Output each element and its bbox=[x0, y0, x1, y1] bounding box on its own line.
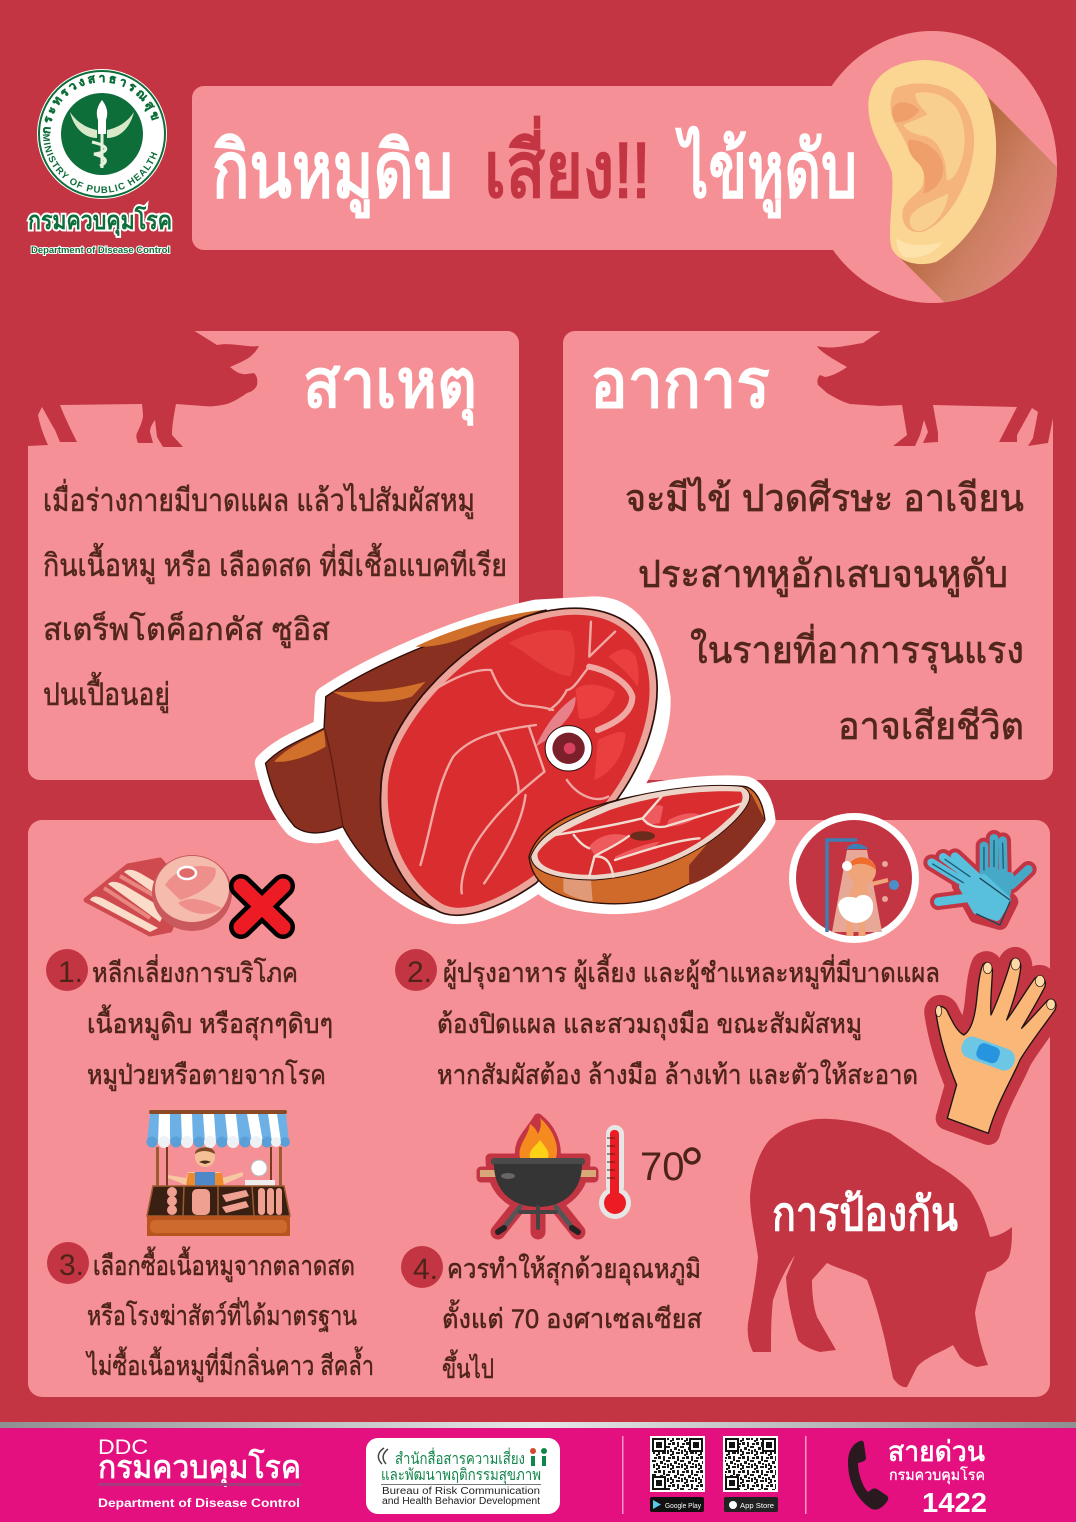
temperature label: 70 bbox=[640, 1145, 684, 1189]
item 2: ต้องปิดแผล และสวมถุงมือ ขณะสัมผัสหมู bbox=[437, 1009, 862, 1041]
item 1: หมูป่วยหรือตายจากโรค bbox=[87, 1060, 326, 1091]
footer: bureau logo: Bureau of Risk Communication bbox=[382, 1486, 540, 1497]
red cross bbox=[241, 886, 283, 927]
icon: grill bbox=[480, 1118, 596, 1232]
text: symptoms: ประสาทหูอักเสบจนหูดับ bbox=[638, 554, 1008, 597]
icon: market stall bbox=[146, 1110, 290, 1236]
icon: ear bbox=[868, 60, 1057, 302]
badge: Google Play: Google Play bbox=[665, 1503, 701, 1510]
icon: hand with bandage bbox=[936, 958, 1056, 1133]
title text bbox=[212, 117, 857, 217]
footer: bureau logo: and Health Behavior Development bbox=[382, 1496, 540, 1507]
title text: ไข้หูดับ bbox=[676, 126, 857, 217]
ear circle backdrop bbox=[807, 31, 1057, 303]
title text: กินหมูดิบ bbox=[212, 126, 453, 217]
item 1 bbox=[46, 949, 333, 1091]
text: symptoms: อาจเสียชีวิต bbox=[838, 706, 1024, 748]
item 4: ขึ้นไป bbox=[442, 1349, 494, 1384]
item 2: หากสัมผัสต้อง ล้างมือ ล้างเท้า และตัวให้สะอาด bbox=[437, 1059, 918, 1090]
text: symptoms: ในรายที่อาการรุนแรง bbox=[690, 624, 1024, 673]
pig silhouette with prevention heading bbox=[748, 1119, 1012, 1387]
logo Thai name: กรมควบคุมโรค bbox=[28, 205, 172, 237]
item 3 bbox=[47, 1242, 374, 1382]
counter bbox=[147, 1186, 290, 1216]
icon: thermometer bbox=[599, 1125, 631, 1219]
badge: App Store bbox=[724, 1497, 778, 1512]
icon: gloves bbox=[932, 838, 1028, 925]
item 2: ผู้ปรุงอาหาร ผู้เลี้ยง และผู้ชำแหละหมูที่มีบาดแผล bbox=[443, 953, 940, 990]
ham side bbox=[265, 610, 546, 910]
panel: causes bbox=[0, 320, 519, 780]
illustration: pork leg and slice bbox=[265, 607, 765, 915]
item 3: เลือกซื้อเนื้อหมูจากตลาดสด bbox=[93, 1246, 355, 1282]
white sticker outline bbox=[265, 607, 765, 914]
footer: bureau logo: และพัฒนาพฤติกรรมสุขภาพ bbox=[381, 1467, 541, 1485]
footer: hotline bbox=[888, 1436, 987, 1518]
text: causes: เมื่อร่างกายมีบาดแผล แล้วไปสัมผัสหมู bbox=[43, 479, 475, 519]
text: causes: ปนเปื้อนอยู่ bbox=[43, 672, 170, 713]
QR code: Google Play bbox=[650, 1436, 705, 1492]
pig silhouette with prevention heading: การป้องกัน bbox=[772, 1187, 958, 1240]
icon: shower bbox=[789, 813, 919, 943]
footer: department name: กรมควบคุมโรค bbox=[98, 1449, 301, 1487]
scale bbox=[245, 1160, 275, 1186]
footer: department name: DDC bbox=[98, 1436, 148, 1459]
logo: Ministry of Public Health: MINISTRY OF PUBLIC HEALTH bbox=[42, 134, 158, 194]
item 1: หลีกเลี่ยงการบริโภค bbox=[92, 954, 298, 988]
footer: department name: Department of Disease Control bbox=[98, 1496, 300, 1510]
text: symptoms: จะมีไข้ ปวดศีรษะ อาเจียน bbox=[625, 477, 1024, 520]
slice bbox=[529, 785, 765, 904]
item 3: ไม่ซื้อเนื้อหมูที่มีกลิ่นคาว สีคล้ำ bbox=[85, 1346, 374, 1382]
item 1: เนื้อหมูดิบ หรือสุกๆดิบๆ bbox=[87, 1004, 333, 1041]
text: causes: สเตร็พโตค็อกคัส ซูอิส bbox=[43, 611, 330, 648]
footer: bureau logo: สำนักสื่อสารความเสี่ยง bbox=[395, 1447, 525, 1468]
logo: Ministry of Public Health: กระทรวงสาธารณสุข bbox=[42, 74, 160, 134]
item 4 bbox=[401, 1246, 702, 1384]
bone bbox=[545, 726, 592, 771]
item 3: 3. bbox=[59, 1249, 84, 1282]
heading: causes: สาเหตุ bbox=[303, 346, 477, 425]
QR code: App Store bbox=[723, 1436, 778, 1492]
footer: hotline: 1422 bbox=[922, 1487, 987, 1518]
ham face fat bbox=[381, 608, 657, 915]
item 2 bbox=[395, 949, 940, 1090]
item 2: 2. bbox=[407, 956, 432, 989]
item 4: ควรทำให้สุกด้วยอุณหภูมิ bbox=[447, 1253, 701, 1286]
pig silhouette right bbox=[817, 320, 1076, 460]
logo: Ministry of Public Health bbox=[26, 69, 172, 256]
pig silhouette left bbox=[0, 320, 259, 447]
badge: Google Play bbox=[650, 1497, 704, 1512]
title banner bbox=[192, 31, 1057, 303]
badge: App Store: App Store bbox=[740, 1503, 774, 1510]
panel: prevention bbox=[28, 813, 1056, 1397]
footer: hotline: กรมควบคุมโรค bbox=[889, 1466, 985, 1485]
text: symptoms bbox=[625, 477, 1024, 748]
title text: เสี่ยง!! bbox=[484, 117, 650, 214]
heading: symptoms: อาการ bbox=[590, 346, 770, 422]
icon: bacon and pork with red cross bbox=[86, 855, 283, 934]
logo English name: Department of Disease Control bbox=[31, 245, 170, 256]
text: causes bbox=[43, 479, 507, 713]
footer: hotline: สายด่วน bbox=[888, 1436, 985, 1467]
emblem bbox=[70, 100, 134, 168]
footer: department name bbox=[98, 1436, 301, 1510]
footer bbox=[0, 1422, 1076, 1522]
item 4: ตั้งแต่ 70 องศาเซลเซียส bbox=[442, 1299, 702, 1334]
icon: phone bbox=[848, 1441, 888, 1510]
vendor bbox=[168, 1147, 243, 1187]
item 3: หรือโรงฆ่าสัตว์ที่ได้มาตรฐาน bbox=[87, 1297, 357, 1332]
ham face meat bbox=[388, 615, 650, 908]
footer: bureau logo bbox=[366, 1438, 560, 1514]
panel: symptoms bbox=[563, 320, 1076, 780]
fat seams bbox=[420, 622, 615, 893]
item 4: 4. bbox=[413, 1253, 438, 1286]
item 1: 1. bbox=[58, 956, 83, 989]
text: causes: กินเนื้อหมู หรือ เลือดสด ที่มีเชื้อแบคทีเรีย bbox=[43, 543, 507, 584]
